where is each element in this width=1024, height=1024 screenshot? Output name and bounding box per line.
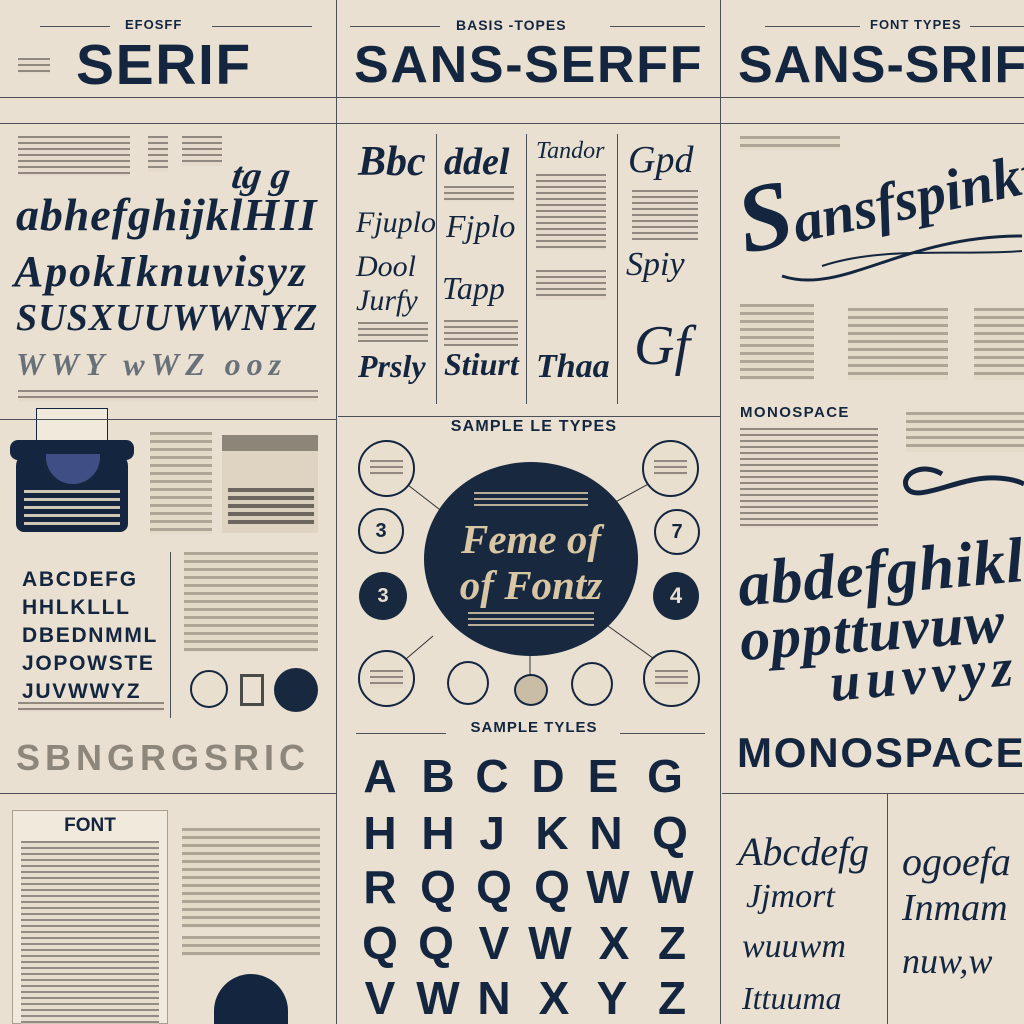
panel: script cards: Ittuuma bbox=[742, 980, 842, 1016]
alphabet row 2: K bbox=[535, 807, 569, 859]
alphabet row 2: Q bbox=[652, 807, 688, 859]
panel: sample types diagram bbox=[358, 418, 700, 707]
alphabet row 2: J bbox=[479, 807, 505, 859]
small heading: font types: FONT TYPES bbox=[870, 17, 962, 32]
body bbox=[16, 452, 128, 532]
script caption bbox=[740, 136, 840, 150]
alphabet row 3: Q bbox=[420, 861, 456, 913]
panel: script cards: wuuwm bbox=[742, 928, 846, 965]
heading: sample le types: SAMPLE LE TYPES bbox=[451, 418, 617, 435]
alphabet row 5: V bbox=[365, 972, 395, 1024]
flourish bbox=[902, 466, 1024, 496]
paragraph bbox=[740, 428, 878, 528]
script row 3: uuvvyz bbox=[827, 637, 1021, 713]
circle 7 right bbox=[654, 509, 700, 555]
panel: sans-serif script samples: Spiy bbox=[626, 246, 685, 283]
alphabet row 2: N bbox=[589, 807, 623, 859]
circle text bbox=[370, 460, 403, 476]
typewriter side cards bbox=[150, 432, 318, 534]
panel: script cards: nuw,w bbox=[902, 941, 992, 981]
panel: sample card group bbox=[184, 552, 318, 712]
alphabet row 3: Q bbox=[476, 861, 512, 913]
alphabet row 3: W bbox=[586, 861, 630, 913]
faded alphabet row: WWY wWZ ooz bbox=[16, 346, 287, 382]
badge title: Feme of bbox=[461, 516, 601, 562]
panel: alphabet card bbox=[18, 568, 164, 710]
alphabet row 1: E bbox=[588, 750, 618, 802]
alphabet row 1: D bbox=[531, 750, 565, 802]
alphabet block: DBEDNMML bbox=[22, 624, 158, 647]
panel: text columns lower left bbox=[182, 828, 320, 1024]
paragraph bbox=[21, 841, 159, 1024]
badge upper text bbox=[474, 492, 588, 506]
small circles row bbox=[447, 661, 489, 705]
icon: stamp bbox=[240, 674, 264, 706]
right card script: ogoefa bbox=[902, 839, 1011, 884]
panel: sans-serif script samples: Jurfy bbox=[356, 284, 418, 317]
heading: serif: SERIF bbox=[76, 33, 252, 97]
alphabet row 4: W bbox=[528, 917, 572, 969]
footer text bbox=[18, 702, 164, 712]
alphabet row 4 bbox=[362, 917, 686, 969]
circle top left bbox=[358, 440, 415, 497]
flourish bbox=[782, 234, 1022, 282]
panel: sans-srif header bbox=[738, 17, 1024, 94]
alphabet row 1: G bbox=[647, 750, 683, 802]
platen bbox=[10, 440, 134, 460]
badge title bbox=[460, 516, 604, 608]
alphabet row 4: SUSXUUWWNYZ bbox=[16, 297, 318, 339]
alphabet row 5 bbox=[365, 972, 686, 1024]
heading: monospace large: MONOSPACE bbox=[737, 729, 1024, 776]
circle 3 left bbox=[358, 508, 404, 554]
panel: sans-serif script samples: Dool bbox=[356, 250, 416, 283]
panel: script cards: Inmam bbox=[902, 887, 1008, 929]
script column 4: Gpd bbox=[628, 139, 693, 181]
alphabet row 3: ApokIknuvisyz bbox=[14, 247, 308, 296]
icon: dark seal bbox=[274, 668, 318, 712]
alphabet row 1: tg g bbox=[229, 155, 293, 197]
panel: sans-serif header bbox=[354, 17, 703, 94]
paper bbox=[36, 408, 108, 454]
text thumbnails bbox=[740, 304, 814, 380]
left card script: Abcdefg bbox=[738, 829, 869, 874]
panel: script cards: Jjmort bbox=[746, 878, 835, 915]
small heading: basis types: BASIS -TOPES bbox=[456, 17, 567, 33]
alphabet row 2 bbox=[363, 807, 688, 859]
script column 1: Bbc bbox=[358, 139, 426, 185]
dark circle 4: 4 bbox=[670, 583, 682, 608]
dark circle 4 bbox=[653, 572, 699, 620]
circle text bbox=[370, 670, 403, 688]
panel: sans-serif script samples: Prsly bbox=[358, 348, 426, 384]
dark circle 3: 3 bbox=[377, 585, 389, 607]
alphabet row 5: X bbox=[539, 972, 569, 1024]
alphabet block: HHLKLLL bbox=[22, 596, 131, 619]
circle bottom left bbox=[358, 650, 415, 707]
alphabet row 5: Y bbox=[597, 972, 627, 1024]
text area bbox=[184, 552, 318, 652]
ribbon bbox=[46, 454, 100, 484]
keys bbox=[24, 490, 120, 526]
heading: font: FONT bbox=[64, 815, 116, 836]
text block middle bbox=[182, 936, 320, 956]
heading: sans-srif: SANS-SRIF bbox=[738, 36, 1024, 94]
circle text bbox=[655, 670, 688, 688]
circle 3 left: 3 bbox=[375, 520, 387, 542]
small heading: fonts: EFOSFF bbox=[125, 17, 182, 32]
note: serif caption bbox=[18, 58, 50, 74]
alphabet row 1: B bbox=[421, 750, 455, 802]
dark circle 3 bbox=[359, 572, 407, 620]
alphabet row 1: A bbox=[363, 750, 397, 802]
banner: faded sans serif: SBNGRGSRIC bbox=[16, 737, 310, 778]
icon: typewriter small bbox=[214, 974, 288, 1024]
circle text bbox=[654, 460, 687, 476]
alphabet row 2: H bbox=[421, 807, 455, 859]
alphabet row 2: H bbox=[363, 807, 397, 859]
central badge bbox=[424, 462, 638, 656]
alphabet row 4: X bbox=[599, 917, 629, 969]
alphabet row 4: Z bbox=[658, 917, 686, 969]
alphabet block: ABCDEFG bbox=[22, 568, 138, 591]
specimen text blocks bbox=[18, 136, 130, 176]
panel: big script bbox=[727, 136, 1024, 380]
panel: sans-serif script samples bbox=[356, 138, 698, 385]
alphabet row 5: W bbox=[416, 972, 460, 1024]
machine card bbox=[222, 435, 318, 533]
icon: typewriter bbox=[10, 408, 134, 532]
thumbnail bbox=[906, 412, 1024, 452]
panel: script cards bbox=[736, 829, 1011, 1016]
panel: sans-serif script samples: Stiurt bbox=[444, 346, 519, 382]
script column 2: ddel bbox=[444, 141, 509, 183]
text card bbox=[150, 432, 212, 534]
alphabet row 5: Z bbox=[658, 972, 686, 1024]
alphabet row 3: R bbox=[363, 861, 397, 913]
panel: sans-serif script samples: Thaa bbox=[536, 348, 610, 385]
panel: serif header bbox=[18, 17, 252, 97]
alphabet block: JUVWWYZ bbox=[22, 680, 141, 703]
script row 1: abdefghikl bbox=[735, 524, 1024, 620]
script row 2: oppttuvuw bbox=[738, 589, 1007, 673]
alphabet block bbox=[22, 568, 158, 703]
alphabet row 4: V bbox=[479, 917, 509, 969]
heading: sample tyles: SAMPLE TYLES bbox=[470, 719, 598, 736]
circle top right bbox=[642, 440, 699, 497]
heading: monospace: MONOSPACE bbox=[740, 404, 850, 421]
alphabet block: JOPOWSTE bbox=[22, 652, 155, 675]
connector lines bbox=[406, 484, 652, 674]
alphabet row 1: C bbox=[475, 750, 509, 802]
panel: sans-serif script samples: Fjplo bbox=[446, 208, 515, 244]
alphabet row 3 bbox=[363, 861, 694, 913]
badge lower text bbox=[468, 612, 594, 630]
circle bottom right bbox=[643, 650, 700, 707]
alphabet row 2: abhefghijklHII bbox=[16, 189, 317, 240]
machine keys bbox=[228, 488, 314, 524]
text block top bbox=[182, 828, 320, 928]
panel: serif alphabet specimen bbox=[12, 136, 318, 398]
machine header bbox=[222, 435, 318, 451]
alphabet row 4: Q bbox=[362, 917, 398, 969]
panel: monospace section bbox=[740, 404, 1024, 526]
panel: font page card bbox=[12, 810, 168, 1024]
panel: sans-serif script samples: Gf bbox=[634, 315, 690, 377]
heading: sans-serff: SANS-SERFF bbox=[354, 36, 703, 94]
panel: sample alphabet bbox=[362, 719, 694, 1024]
alphabet row 1 bbox=[363, 750, 683, 802]
alphabet row 4: Q bbox=[418, 917, 454, 969]
badge title: of Fontz bbox=[460, 562, 602, 608]
circle 7 right: 7 bbox=[671, 521, 683, 543]
icon: circle bbox=[190, 670, 228, 708]
panel: script alphabet bbox=[735, 524, 1024, 713]
panel: sans-serif script samples: Fjuplo bbox=[356, 206, 436, 239]
alphabet row 3: W bbox=[650, 861, 694, 913]
alphabet row 3: Q bbox=[534, 861, 570, 913]
panel: sans-serif script samples: Tapp bbox=[442, 270, 505, 306]
alphabet row 5: N bbox=[477, 972, 511, 1024]
script column 3: Tandor bbox=[536, 138, 604, 164]
